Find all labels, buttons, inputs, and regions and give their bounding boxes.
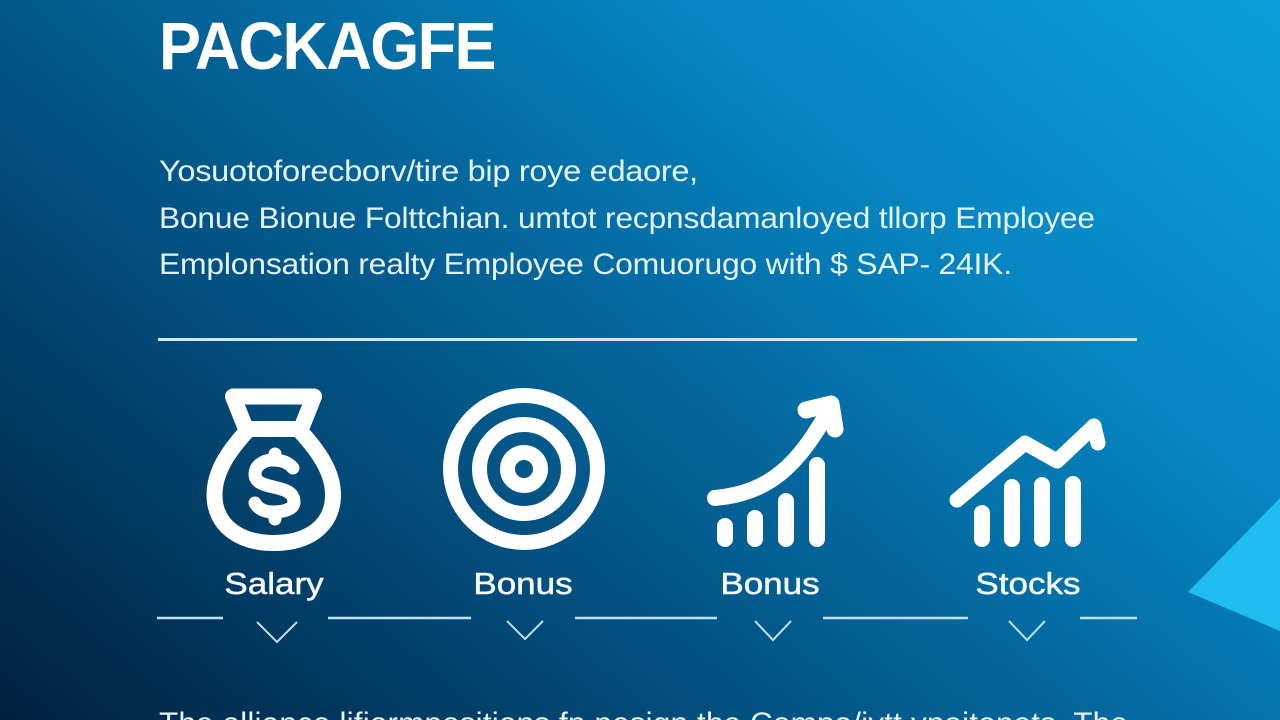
divider line [158,338,1137,341]
label: Bonus: Bonus [720,566,820,601]
label: Bonus: Bonus [473,566,573,601]
text block: intro: Yosuotoforecborv/tire bip roye edaore, [159,155,698,188]
title: PACKAGFE [159,9,495,84]
label: Salary: Salary [224,566,324,601]
label: Stocks: Stocks [975,566,1081,601]
text block: intro: Bonue Bionue Folttchian. umtot recpnsdamanloyed tllorp Employee [159,202,1095,235]
text block: intro [159,155,1095,281]
text block: intro: Emplonsation realty Employee Comuorugo with $ SAP- 24IK. [159,248,1012,281]
